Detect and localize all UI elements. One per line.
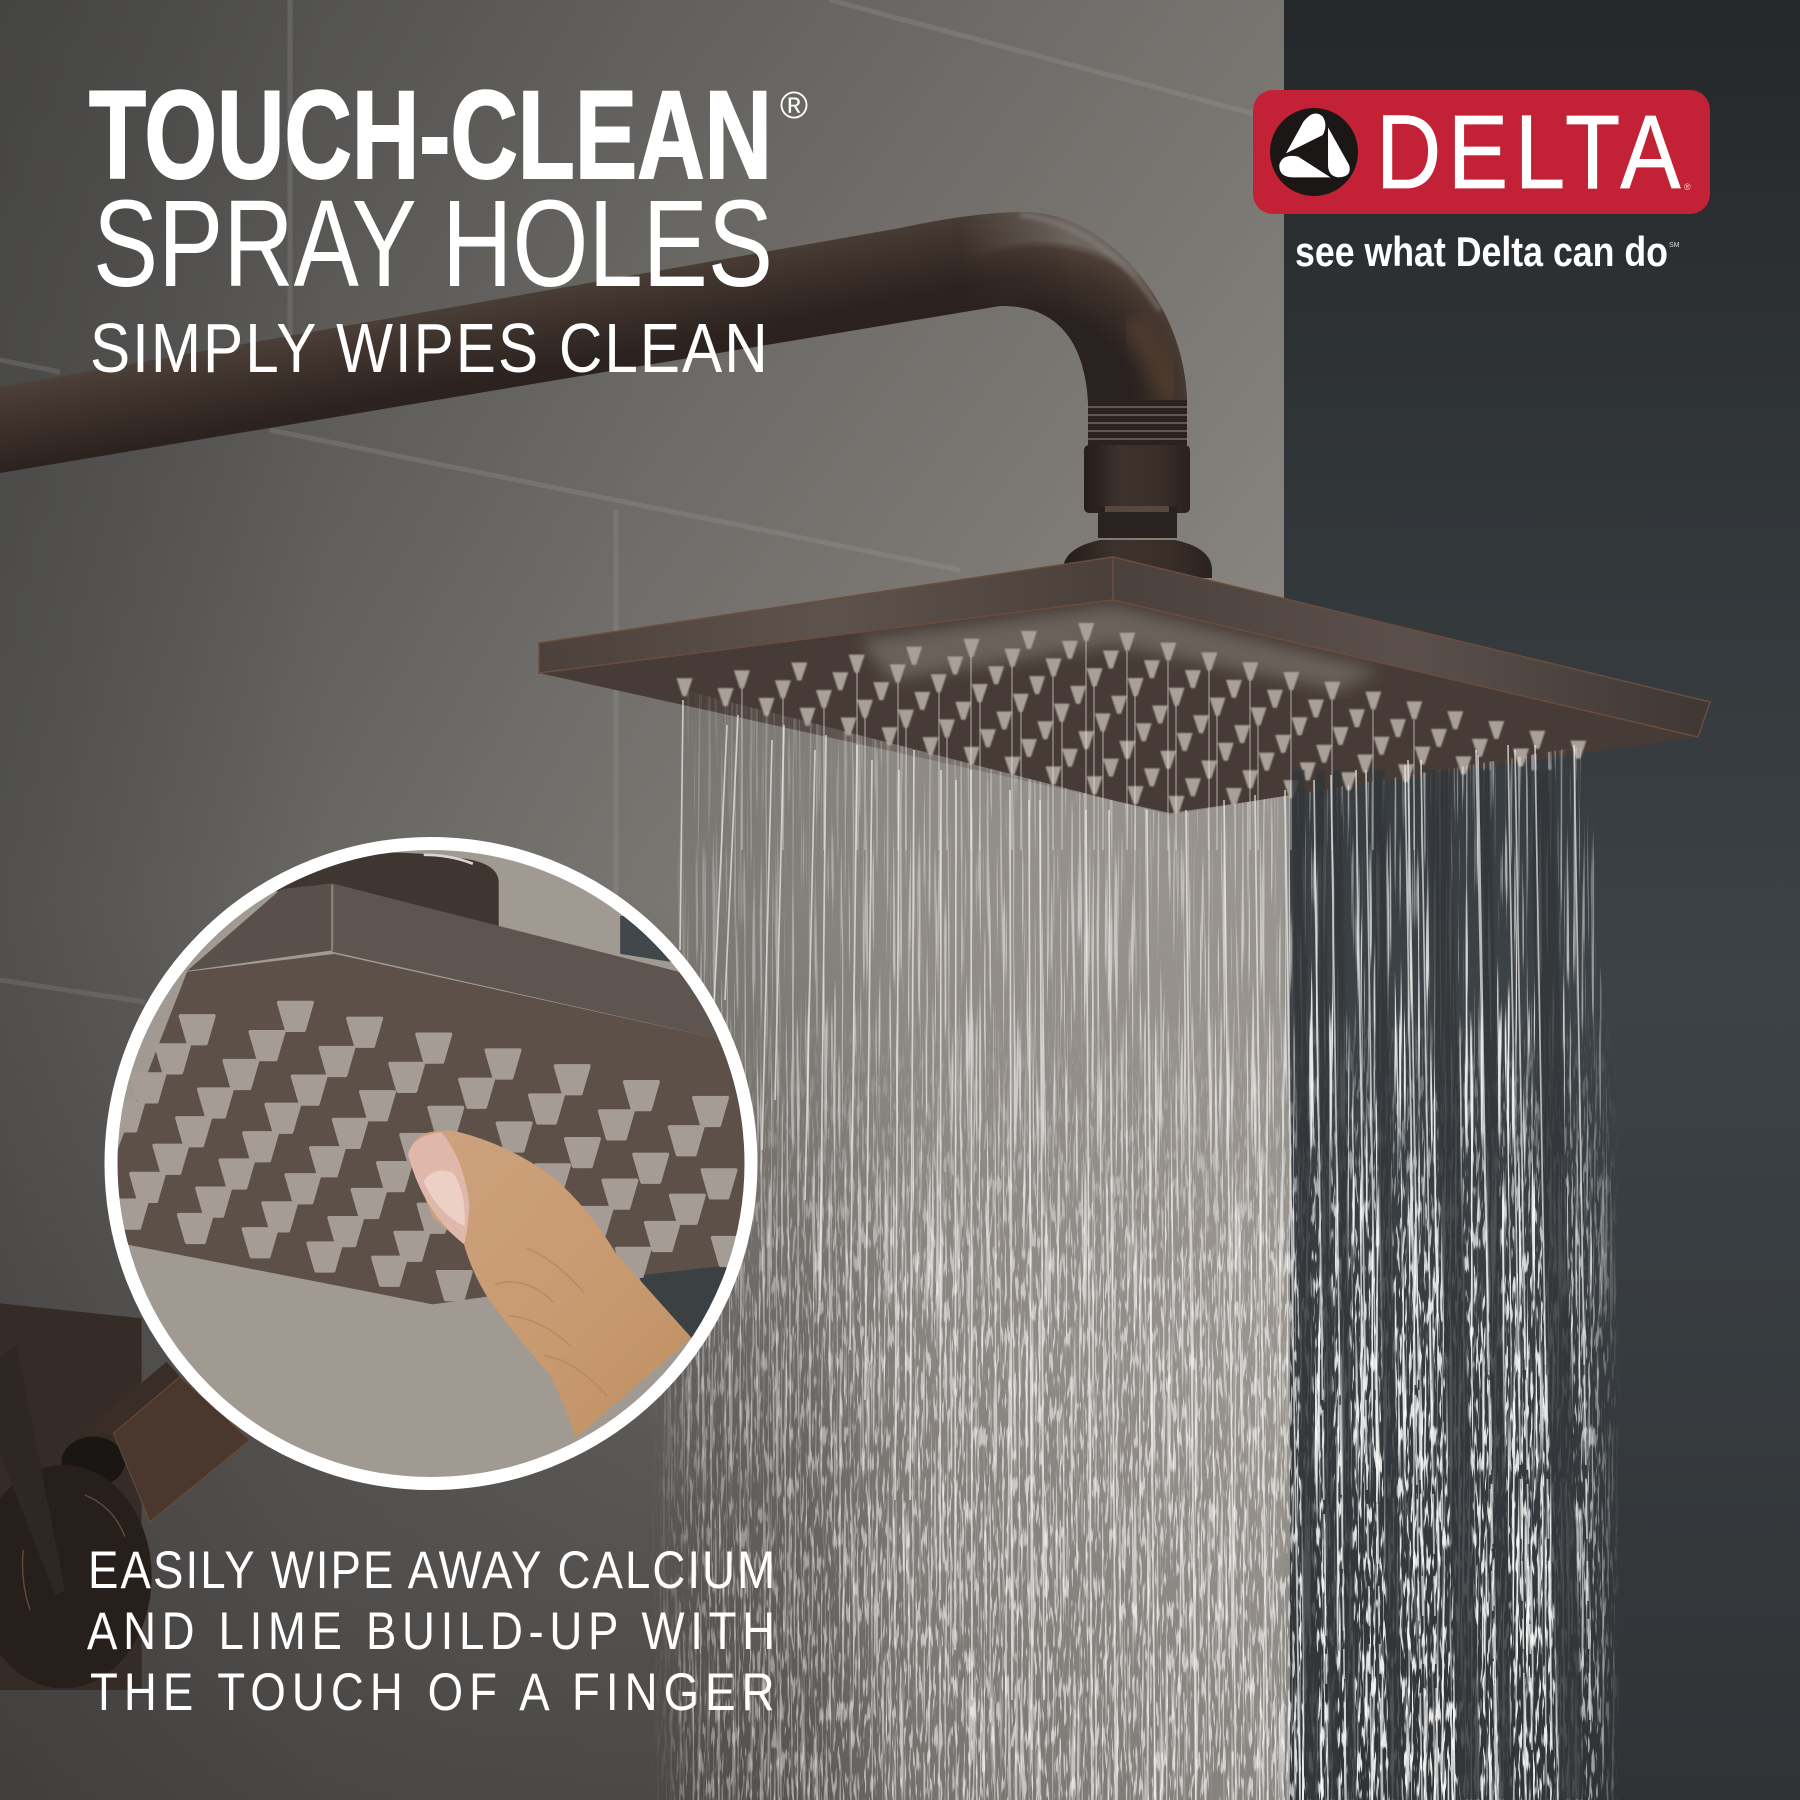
valve lever	[0, 1345, 65, 1595]
dark panel glimpse bottom	[639, 1266, 727, 1339]
emblem triangle petals	[1279, 113, 1350, 177]
ball joint	[62, 1437, 125, 1487]
logo registered mark: ®	[1684, 182, 1691, 192]
dark wall panel	[1284, 0, 1800, 1800]
inset photo	[118, 850, 744, 1477]
threads	[1088, 400, 1187, 445]
inset underside	[107, 954, 747, 1304]
delta logo	[1253, 90, 1710, 275]
magnified inset circle	[100, 830, 770, 1500]
falling water	[640, 641, 1630, 1800]
nozzle grid	[676, 623, 1586, 814]
subtitle: SIMPLY WIPES CLEAN	[90, 309, 768, 387]
inset corner highlight	[331, 884, 334, 950]
bottom caption: EASILY WIPE AWAY CALCIUM	[88, 1541, 775, 1600]
service mark: SM	[1669, 242, 1680, 249]
dark panel glimpse top	[620, 916, 671, 962]
right face of head	[1113, 557, 1710, 737]
shower arm	[0, 212, 1187, 473]
flange	[1063, 540, 1212, 578]
collar	[1098, 506, 1177, 538]
blurred back nozzles	[860, 605, 1380, 690]
neck of head	[267, 852, 499, 927]
inset nozzles	[110, 1003, 746, 1299]
tagline: see what Delta can do	[1295, 228, 1668, 275]
dark bracket	[0, 1303, 142, 1690]
valve disc	[0, 1465, 152, 1688]
shower head	[539, 557, 1710, 814]
red badge	[1253, 90, 1710, 214]
inset white ring	[111, 844, 751, 1484]
skin creases	[495, 1249, 607, 1396]
lit wall behind water	[718, 699, 1290, 1800]
threaded neck and nut	[1063, 400, 1212, 578]
finger	[408, 1130, 692, 1438]
title: touch-clean: TOUCH-CLEAN	[89, 66, 772, 205]
lower-left wall fixture	[0, 1303, 250, 1690]
fingernail	[408, 1132, 469, 1244]
underside of head	[539, 600, 1698, 813]
delta wordmark: DELTA	[1376, 93, 1681, 211]
inset right face	[332, 883, 718, 1039]
bottom caption: AND LIME BUILD-UP WITH	[87, 1602, 775, 1661]
dial markings	[22, 1495, 125, 1610]
inset left face	[187, 883, 332, 971]
square arm face	[113, 1377, 250, 1522]
title: spray holes: SPRAY HOLES	[93, 176, 773, 313]
nut	[1084, 445, 1190, 513]
individual water lines	[680, 641, 1590, 1800]
water streak noise	[640, 690, 1630, 1800]
dark gaps between right water columns	[1298, 770, 1572, 1800]
left face of head	[539, 557, 1113, 673]
water droplet noise	[640, 1000, 1630, 1800]
square arm top	[80, 1362, 180, 1435]
bottom caption: THE TOUCH OF A FINGER	[90, 1663, 775, 1722]
bottom caption	[87, 1541, 775, 1722]
registered mark: ®	[780, 85, 808, 127]
black emblem circle	[1270, 108, 1358, 196]
neck highlight	[424, 855, 473, 864]
